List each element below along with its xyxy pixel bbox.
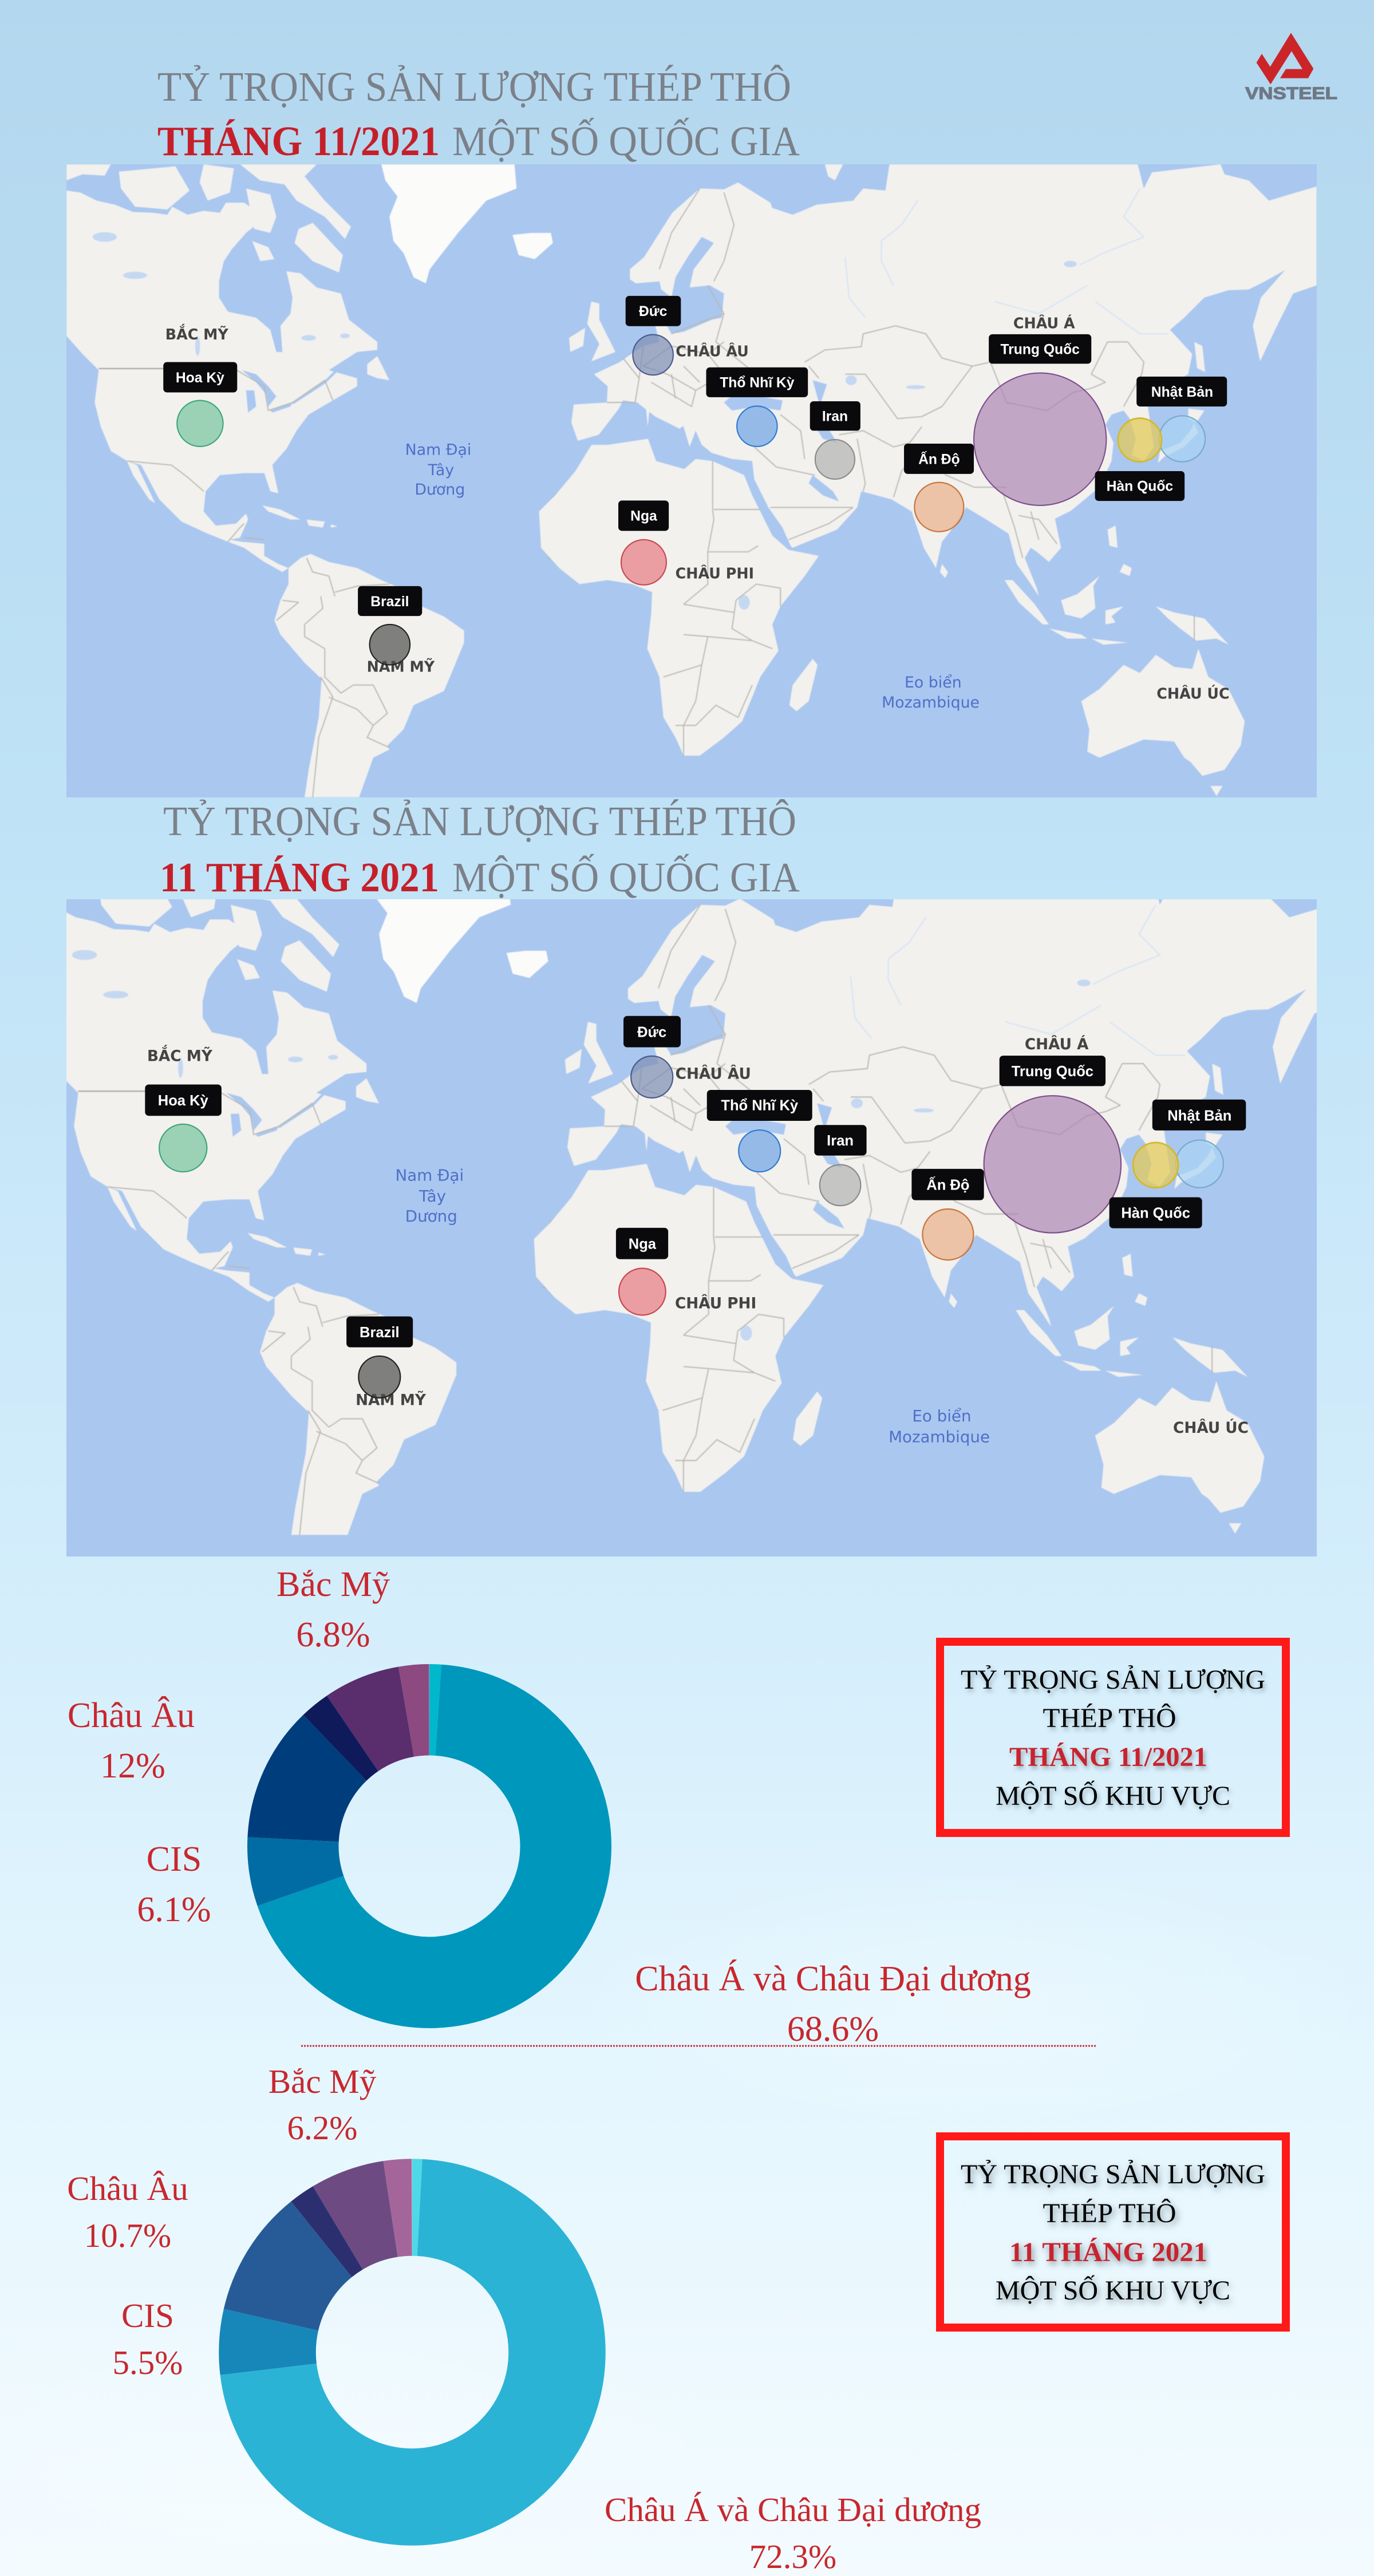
donut 1 labels: CIS <box>147 1840 202 1879</box>
region labels: Tây <box>428 461 454 479</box>
bubble: Trung Quốc <box>984 1056 1121 1233</box>
donut 1 labels: 6.1% <box>137 1890 211 1929</box>
region labels: NAM MỸ <box>356 1390 427 1409</box>
region labels: CHÂU ÚC <box>1173 1419 1249 1437</box>
bubble: Trung Quốc <box>974 334 1106 505</box>
callout box 1: THÉP THÔ <box>1043 1702 1176 1733</box>
title: map 2 heading: TỶ TRỌNG SẢN LƯỢNG THÉP THÔ <box>163 798 796 844</box>
bubble: Trung Quốc: Trung Quốc <box>1000 342 1080 357</box>
callout box 2: TỶ TRỌNG SẢN LƯỢNG <box>961 2159 1265 2190</box>
region labels: Nam Đại <box>405 441 471 459</box>
region labels: CHÂU ÂU <box>676 343 749 360</box>
region labels: CHÂU Á <box>1025 1035 1089 1053</box>
bubble: Hàn Quốc: Hàn Quốc <box>1107 479 1173 495</box>
bubble: Brazil: Brazil <box>360 1325 400 1341</box>
donut 2 labels: Châu Á và Châu Đại dương <box>605 2491 981 2528</box>
bubble: Brazil <box>346 1317 413 1398</box>
donut 2 labels: 72.3% <box>749 2538 836 2575</box>
bubble: Nhật Bản: Nhật Bản <box>1151 385 1213 400</box>
donut 1 labels: 6.8% <box>296 1615 370 1654</box>
bubble: Hàn Quốc <box>1095 418 1185 501</box>
callout box 1: TỶ TRỌNG SẢN LƯỢNG <box>961 1665 1265 1695</box>
bubble: Iran <box>814 1125 867 1206</box>
donut 1 labels: Châu Á và Châu Đại dương <box>635 1959 1031 1998</box>
logo: VNSTEEL <box>1245 33 1337 103</box>
donut 2 labels: Châu Âu <box>67 2170 188 2207</box>
bubble: Ấn Độ: Ấn Độ <box>926 1176 969 1193</box>
bubble: Hàn Quốc <box>1110 1143 1202 1228</box>
bubble: Hàn Quốc: Hàn Quốc <box>1121 1205 1190 1221</box>
callout box 2 <box>940 2136 1286 2328</box>
bubble: Thổ Nhĩ Kỳ: Thổ Nhĩ Kỳ <box>720 375 795 390</box>
title: map 1 heading <box>157 64 800 164</box>
title: map 1 heading: MỘT SỐ QUỐC GIA <box>452 117 800 164</box>
bubble: Ấn Độ <box>904 444 974 532</box>
bubble: Thổ Nhĩ Kỳ <box>707 1090 812 1172</box>
region labels: Dương <box>414 481 465 499</box>
region labels: Eo biển <box>912 1406 972 1425</box>
donut 1 labels: 68.6% <box>787 2010 879 2049</box>
donut 2 labels: 5.5% <box>113 2344 183 2381</box>
title: map 1 heading: TỶ TRỌNG SẢN LƯỢNG THÉP THÔ <box>157 64 791 110</box>
region labels: Mozambique <box>882 694 980 712</box>
region labels: Dương <box>405 1207 457 1226</box>
donut 2 labels: 10.7% <box>84 2217 171 2254</box>
bubble: Thổ Nhĩ Kỳ: Thổ Nhĩ Kỳ <box>721 1098 799 1114</box>
logo: VNSTEEL: VNSTEEL <box>1245 84 1337 103</box>
bubble: Iran: Iran <box>827 1133 854 1149</box>
bubble: Nhật Bản <box>1152 1100 1246 1188</box>
bubble: Nga <box>616 1228 668 1315</box>
region labels: CHÂU ÂU <box>676 1064 751 1082</box>
title: map 2 heading <box>160 798 800 900</box>
title: map 1 heading: THÁNG 11/2021 <box>157 118 440 164</box>
bubble: Hoa Kỳ <box>145 1084 222 1172</box>
dotted divider <box>301 2045 1097 2047</box>
callout box 1: THÁNG 11/2021 <box>1009 1742 1207 1772</box>
donut 2 labels <box>67 2063 981 2575</box>
bubble: Đức <box>626 296 681 375</box>
region labels: BẮC MỸ <box>147 1045 213 1065</box>
region labels: CHÂU PHI <box>676 565 754 582</box>
bubble: Trung Quốc: Trung Quốc <box>1012 1064 1093 1080</box>
bubble: Iran: Iran <box>822 409 848 425</box>
callout box 2: THÉP THÔ <box>1043 2198 1176 2229</box>
bubble: Iran <box>810 401 860 479</box>
bubble: Ấn Độ <box>911 1169 984 1260</box>
donut 1 labels: Châu Âu <box>68 1696 195 1735</box>
bubble: Nhật Bản <box>1136 377 1227 462</box>
bubble: Ấn Độ: Ấn Độ <box>918 451 960 467</box>
bubble: Nga <box>618 500 669 585</box>
bubble: Hoa Kỳ: Hoa Kỳ <box>158 1093 209 1109</box>
bubble: Đức <box>623 1016 681 1098</box>
bubble: Nga: Nga <box>629 1236 657 1252</box>
region labels: CHÂU ÚC <box>1156 685 1230 702</box>
bubble: Đức: Đức <box>639 304 667 319</box>
donut chart 1: November 2021 by region <box>293 1710 566 1982</box>
map 1: world map November 2021 <box>66 164 1317 797</box>
callout box 2: MỘT SỐ KHU VỰC <box>996 2274 1230 2306</box>
bubble: Brazil: Brazil <box>370 594 409 610</box>
region labels: Tây <box>418 1187 446 1206</box>
region labels: NAM MỸ <box>367 658 435 675</box>
bubble: Brazil <box>358 586 422 665</box>
region labels <box>147 1035 1249 1446</box>
bubble: Nga: Nga <box>630 509 657 524</box>
callout box 1 <box>940 1642 1286 1833</box>
region labels <box>165 314 1230 712</box>
base map land <box>66 164 1317 797</box>
donut 2 labels: Bắc Mỹ <box>269 2063 377 2100</box>
region labels: Mozambique <box>889 1427 990 1446</box>
country bubbles and tags <box>163 296 1227 665</box>
title: map 2 heading: 11 THÁNG 2021 <box>160 854 439 900</box>
region labels: CHÂU Á <box>1013 314 1075 331</box>
donut 1 labels: 12% <box>100 1747 165 1785</box>
bubble: Hoa Kỳ: Hoa Kỳ <box>176 370 224 386</box>
callout box 2: 11 THÁNG 2021 <box>1009 2237 1207 2267</box>
donut 2 labels: CIS <box>121 2297 174 2334</box>
title: map 2 heading: MỘT SỐ QUỐC GIA <box>452 854 800 900</box>
donut 1 labels <box>68 1565 1031 2049</box>
callout box 1: MỘT SỐ KHU VỰC <box>996 1780 1230 1811</box>
bubble: Đức: Đức <box>637 1024 666 1040</box>
region labels: Nam Đại <box>396 1165 464 1184</box>
bubble: Thổ Nhĩ Kỳ <box>706 368 808 447</box>
bubble: Hoa Kỳ <box>163 362 237 447</box>
donut chart 2: 11 months 2021 by region <box>267 2207 557 2497</box>
bubble: Nhật Bản: Nhật Bản <box>1167 1108 1231 1124</box>
donut 1 labels: Bắc Mỹ <box>277 1565 390 1604</box>
region labels: CHÂU PHI <box>675 1294 756 1313</box>
map 2: world map 11 months 2021 <box>66 899 1317 1556</box>
country bubbles and tags <box>145 1016 1246 1398</box>
region labels: Eo biển <box>905 674 962 692</box>
donut 2 labels: 6.2% <box>287 2109 357 2147</box>
region labels: BẮC MỸ <box>165 324 228 343</box>
